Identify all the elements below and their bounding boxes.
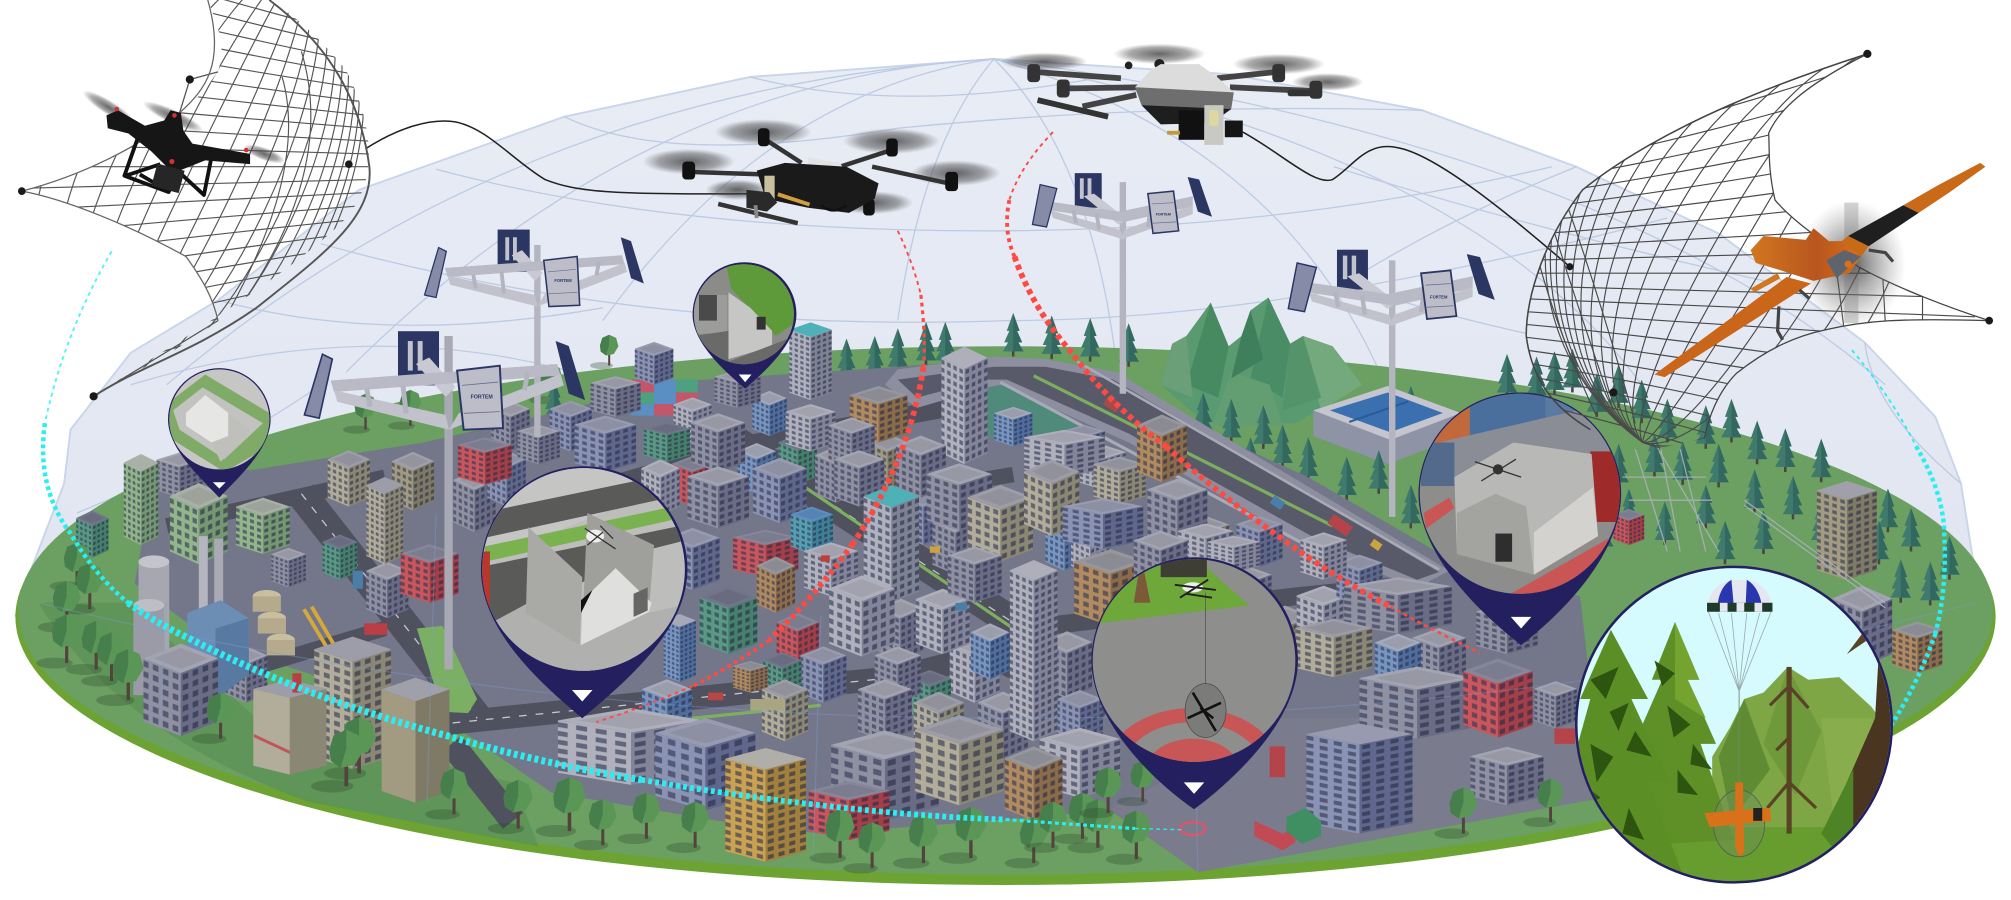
small pin: house on green paths — [167, 366, 276, 498]
elevated highway — [885, 357, 1449, 587]
black hexacopter — [643, 119, 1000, 223]
pine trees behind the city — [836, 313, 1389, 500]
tower 3 — [1032, 173, 1212, 394]
red flight path 2 — [1007, 132, 1480, 653]
orange plane — [1654, 163, 1985, 377]
tower 2 — [304, 331, 585, 669]
ground trees — [36, 543, 1564, 873]
mountains — [1161, 298, 1362, 426]
city buildings, middle rows — [366, 415, 1942, 693]
large pin: drone above open hangar by a road — [475, 462, 693, 718]
right net — [1525, 54, 1986, 448]
shipping containers — [631, 380, 698, 416]
electricity pylons — [1622, 442, 1885, 608]
tether cable right drone — [1243, 132, 1570, 267]
road network — [167, 408, 1424, 821]
red flight path 1 — [596, 231, 924, 722]
ground disc rim — [15, 349, 1996, 885]
small pin: house side view — [693, 262, 798, 389]
net anchor weights, right — [1566, 50, 1993, 397]
skyscraper — [1010, 560, 1058, 741]
dome grid lines over the ground — [38, 513, 1975, 872]
dome grid lines — [77, 59, 1961, 513]
tower 4 — [1288, 250, 1495, 517]
shaded ground at left front — [38, 603, 539, 846]
tether cable left drone — [366, 121, 763, 194]
captured plane in net — [1704, 782, 1771, 857]
net anchor weights, left — [18, 75, 353, 400]
city buildings, back rows — [76, 322, 988, 564]
black quadcopter in left net — [79, 85, 287, 195]
vehicles — [292, 396, 1575, 850]
green median strips — [616, 450, 1013, 726]
helipad target — [1180, 822, 1206, 835]
city buildings, front rows — [558, 618, 1577, 862]
industrial plant — [133, 536, 333, 699]
dense small city blocks — [225, 391, 1466, 759]
green park lot — [417, 626, 477, 713]
grey hexacopter — [1000, 44, 1363, 145]
large pin: drone above hangar in front of buildings — [1411, 385, 1629, 645]
cyan flight path right — [1784, 350, 1945, 840]
tall beige blocks at left front — [144, 637, 449, 803]
city pavement — [135, 359, 1603, 872]
road lane marks — [301, 442, 1026, 725]
ground disc surface — [18, 346, 1993, 875]
pine forest on the right — [1401, 349, 1960, 605]
circle scene: plane caught in net under parachute in forest — [1574, 566, 1893, 884]
pavement plaza front right — [1111, 718, 1603, 872]
tower 1 — [425, 230, 644, 437]
stadium — [1313, 386, 1461, 464]
trees behind the city on the left — [343, 335, 618, 434]
dome shell — [15, 59, 1987, 646]
cyan flight path left — [43, 251, 1184, 830]
large pin: drone lowering net with captured drone above landing ring — [1090, 557, 1300, 831]
left net — [25, 0, 371, 395]
parachute — [1707, 580, 1772, 790]
